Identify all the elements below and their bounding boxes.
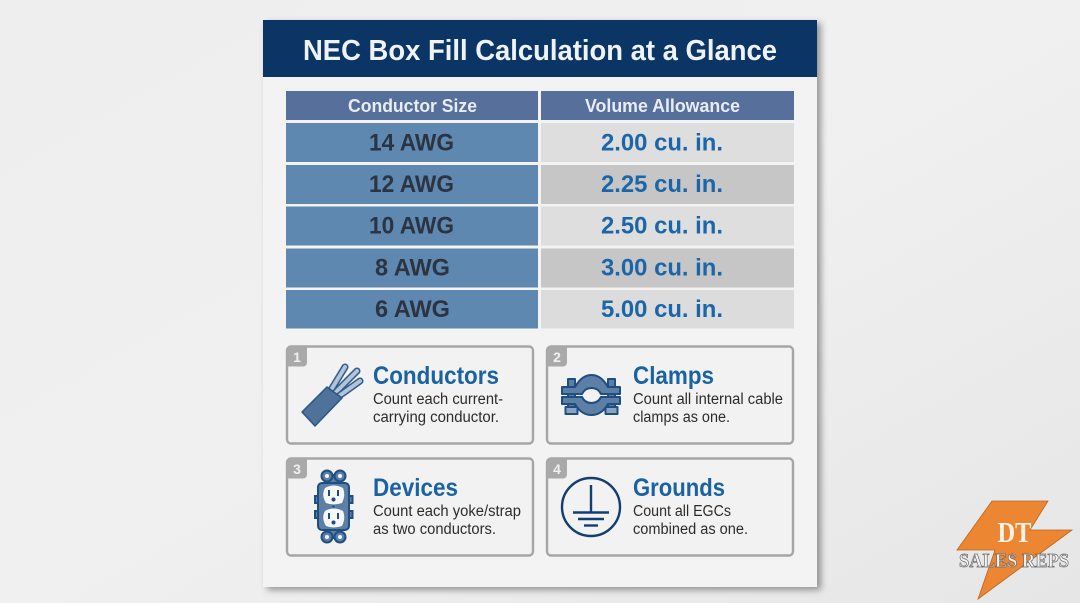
badge 3	[287, 458, 307, 478]
badge 4: 4	[553, 461, 561, 477]
row: 6 AWG	[286, 290, 794, 328]
row: 12 AWG: 12 AWG	[369, 171, 454, 198]
card 2: clamps	[547, 346, 793, 444]
card 4: grounds	[547, 458, 793, 556]
card 1: conductors	[287, 346, 533, 444]
card 1: conductors: Count each current-	[373, 391, 503, 408]
table header: volume allowance	[541, 91, 794, 120]
row: 14 AWG: 2.00 cu. in.	[601, 130, 723, 156]
badge 2: 2	[553, 349, 561, 365]
row: 6 AWG: 6 AWG	[375, 296, 450, 323]
row: 6 AWG: 5.00 cu. in.	[601, 296, 723, 323]
panel: reference sheet	[263, 20, 817, 587]
card 4: grounds: Count all EGCs	[633, 503, 731, 520]
icon: stripped cable	[302, 367, 360, 426]
icon: ground symbol	[562, 478, 620, 536]
title banner	[263, 20, 817, 77]
row: 10 AWG	[286, 206, 794, 246]
title banner: NEC Box Fill Calculation at a Glance	[303, 35, 777, 67]
card 3: devices	[287, 458, 533, 556]
row: 12 AWG: 2.25 cu. in.	[601, 171, 723, 198]
row: 8 AWG: 8 AWG	[375, 254, 450, 282]
card 3: devices: as two conductors.	[373, 521, 496, 538]
badge 1: 1	[293, 349, 301, 365]
row: 10 AWG: 2.50 cu. in.	[601, 212, 723, 240]
table header: conductor size: Conductor Size	[348, 96, 477, 116]
row: 8 AWG	[286, 248, 794, 288]
card 2: clamps: Count all internal cable	[633, 391, 783, 408]
card 3: devices: Devices	[373, 474, 458, 502]
table header: volume allowance: Volume Allowance	[585, 96, 740, 116]
badge 4	[547, 458, 567, 478]
row: 14 AWG: 14 AWG	[369, 130, 454, 156]
card 3: devices: Count each yoke/strap	[373, 503, 521, 520]
card 1: conductors: Conductors	[373, 362, 499, 390]
badge 3: 3	[293, 461, 301, 477]
card 4: grounds: combined as one.	[633, 521, 748, 538]
row: 8 AWG: 3.00 cu. in.	[601, 254, 723, 282]
logo: DT Sales Reps	[957, 501, 1072, 599]
row: 10 AWG: 10 AWG	[369, 212, 454, 240]
card 1: conductors: carrying conductor.	[373, 409, 499, 426]
badge 1	[287, 346, 307, 366]
logo: DT Sales Reps: DT	[998, 517, 1032, 549]
table: conductor volume allowances	[286, 91, 794, 328]
table header: conductor size	[286, 91, 538, 120]
card 2: clamps: clamps as one.	[633, 409, 730, 426]
icon: duplex receptacle	[315, 470, 352, 542]
icon: cable clamp	[562, 375, 620, 415]
badge 2	[547, 346, 567, 366]
icon: orange lightning bolt	[957, 501, 1072, 599]
card 2: clamps: Clamps	[633, 362, 714, 390]
logo: DT Sales Reps: SALES REPS	[959, 550, 1069, 572]
card 4: grounds: Grounds	[633, 474, 725, 502]
row: 14 AWG	[286, 123, 794, 162]
row: 12 AWG	[286, 165, 794, 204]
